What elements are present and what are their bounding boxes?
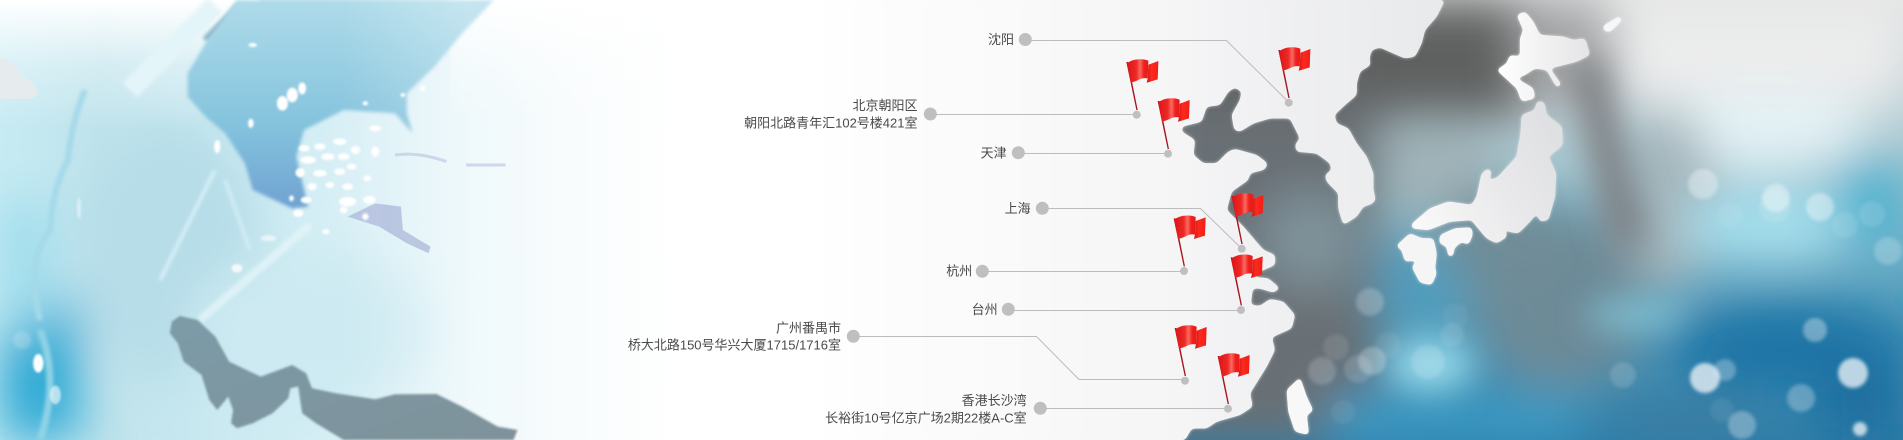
flag: Taizhou xyxy=(1231,255,1263,314)
map of japan and islands xyxy=(1287,12,1622,435)
bokeh lights xyxy=(13,169,1902,439)
sea background xyxy=(1150,0,1903,440)
location: Beijing Chaoyang: 北京朝阳区 xyxy=(852,98,918,113)
ice highlights xyxy=(33,43,425,404)
landmass: australia silhouette xyxy=(170,316,517,440)
location: Guangzhou Panyu xyxy=(628,320,860,352)
location: Hong Kong: 长裕街10号亿京广场2期22楼A-C室 xyxy=(825,410,1027,426)
location: Tianjin xyxy=(981,146,1025,160)
location: Hangzhou: 杭州 xyxy=(946,264,972,278)
location: Taizhou xyxy=(972,302,1015,317)
flag: Shanghai xyxy=(1231,193,1263,253)
location: Taizhou: 台州 xyxy=(972,302,998,317)
flag: Beijing xyxy=(1126,59,1158,119)
location: Beijing Chaoyang xyxy=(744,98,937,130)
shikoku xyxy=(1439,227,1473,257)
flag: Hong Kong xyxy=(1218,353,1250,413)
taiwan xyxy=(1287,377,1313,435)
location: Shanghai: 上海 xyxy=(1005,201,1031,216)
location: Hangzhou xyxy=(946,264,989,278)
continent: central america and caribbean xyxy=(348,154,506,253)
location: Shenyang: 沈阳 xyxy=(988,32,1014,47)
landmass: pale silhouette at left edge xyxy=(0,58,38,99)
location: Guangzhou Panyu: 广州番禺市 xyxy=(776,320,841,336)
map of china and korea coast xyxy=(767,0,1445,440)
location: Tianjin: 天津 xyxy=(981,146,1007,160)
globe illustration xyxy=(0,0,680,440)
soft fade over continent edge xyxy=(340,0,600,440)
hokkaido xyxy=(1497,12,1590,102)
flag: Hangzhou xyxy=(1174,216,1206,275)
location: Hong Kong xyxy=(825,393,1047,426)
flag pins xyxy=(1126,47,1310,413)
kyushu xyxy=(1396,233,1437,285)
flag: Guangzhou xyxy=(1175,325,1207,385)
location: Shenyang xyxy=(988,32,1032,47)
kuril sliver xyxy=(1603,16,1622,32)
location: Guangzhou Panyu: 桥大北路150号华兴大厦1715/1716室 xyxy=(628,338,841,352)
honshu xyxy=(1412,102,1563,243)
flag: Shenyang xyxy=(1278,47,1310,107)
location: Hong Kong: 香港长沙湾 xyxy=(962,393,1027,408)
continent: north america xyxy=(188,0,494,208)
flag: Tianjin xyxy=(1158,98,1190,158)
location: Beijing Chaoyang: 朝阳北路青年汇102号楼421室 xyxy=(744,116,918,130)
connector lines xyxy=(853,40,1289,408)
location: Shanghai xyxy=(1005,201,1049,216)
